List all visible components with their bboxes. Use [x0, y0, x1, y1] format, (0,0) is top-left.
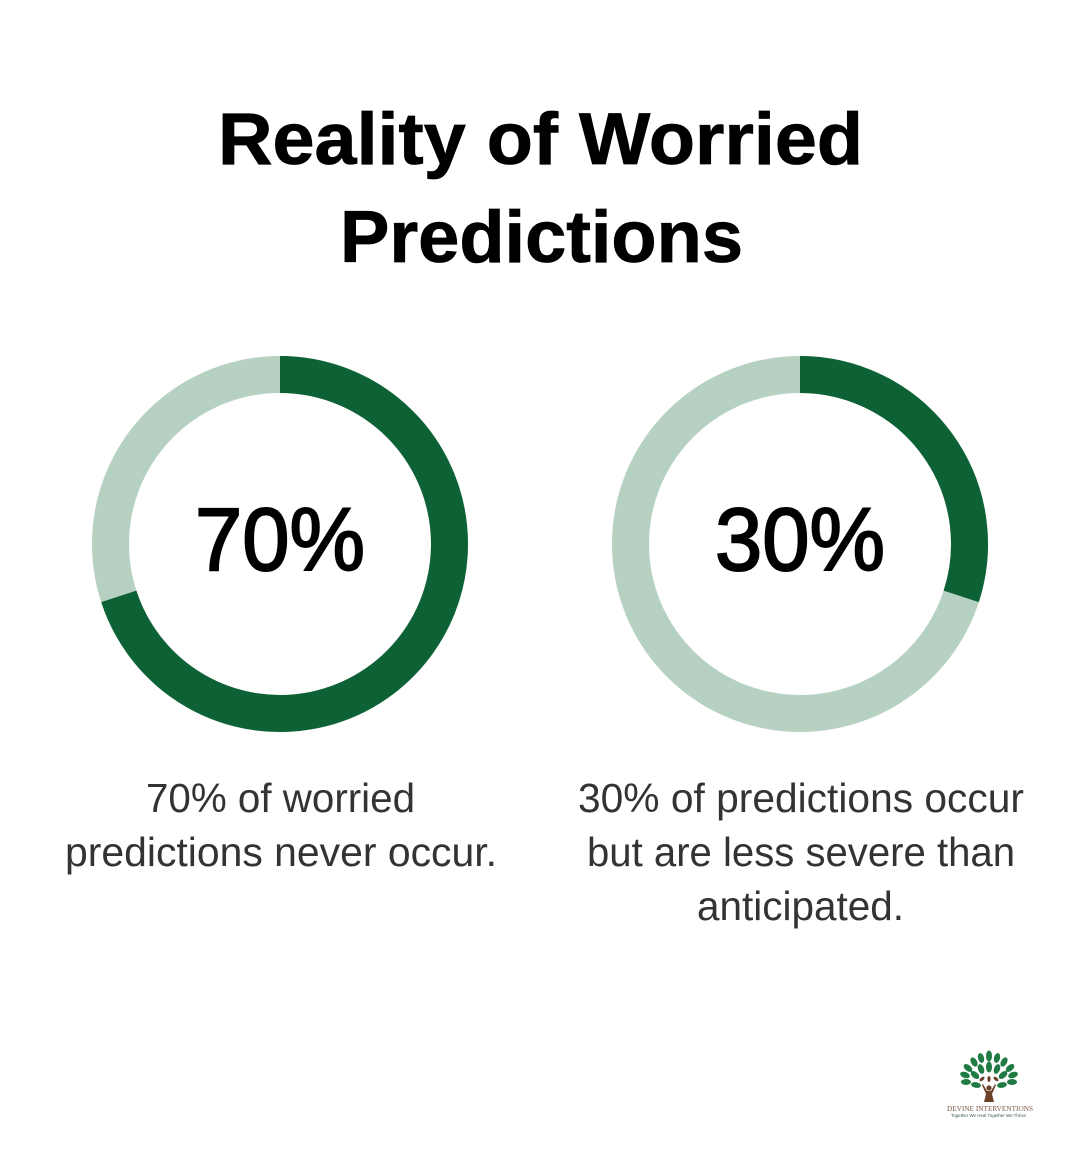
caption: 70%: predictions never occur.: [65, 829, 497, 875]
caption: 70%: [65, 775, 497, 875]
icon: tree: [959, 1050, 1019, 1089]
title: [218, 99, 863, 278]
logo name: DEVINE INTERVENTIONS: [947, 1105, 1033, 1113]
logo: Devine Interventions: [947, 1050, 1033, 1118]
caption: 30%: 30% of predictions occur: [578, 775, 1024, 821]
donut chart: 30%: 30%: [715, 489, 885, 589]
caption: 70%: 70% of worried: [146, 775, 415, 821]
donut chart: 30%: [630, 374, 970, 714]
icon: figure trunk: [979, 1076, 999, 1102]
caption: 30%: [578, 775, 1024, 929]
donut chart: 70%: 70%: [195, 489, 365, 589]
caption: 30%: but are less severe than: [587, 829, 1015, 875]
logo tagline: Together We Heal Together We Thrive: [951, 1113, 1026, 1118]
title: Reality of Worried: [218, 99, 863, 180]
donut chart: 70%: [110, 374, 450, 714]
title: Predictions: [340, 197, 743, 278]
caption: 30%: anticipated.: [697, 883, 904, 929]
